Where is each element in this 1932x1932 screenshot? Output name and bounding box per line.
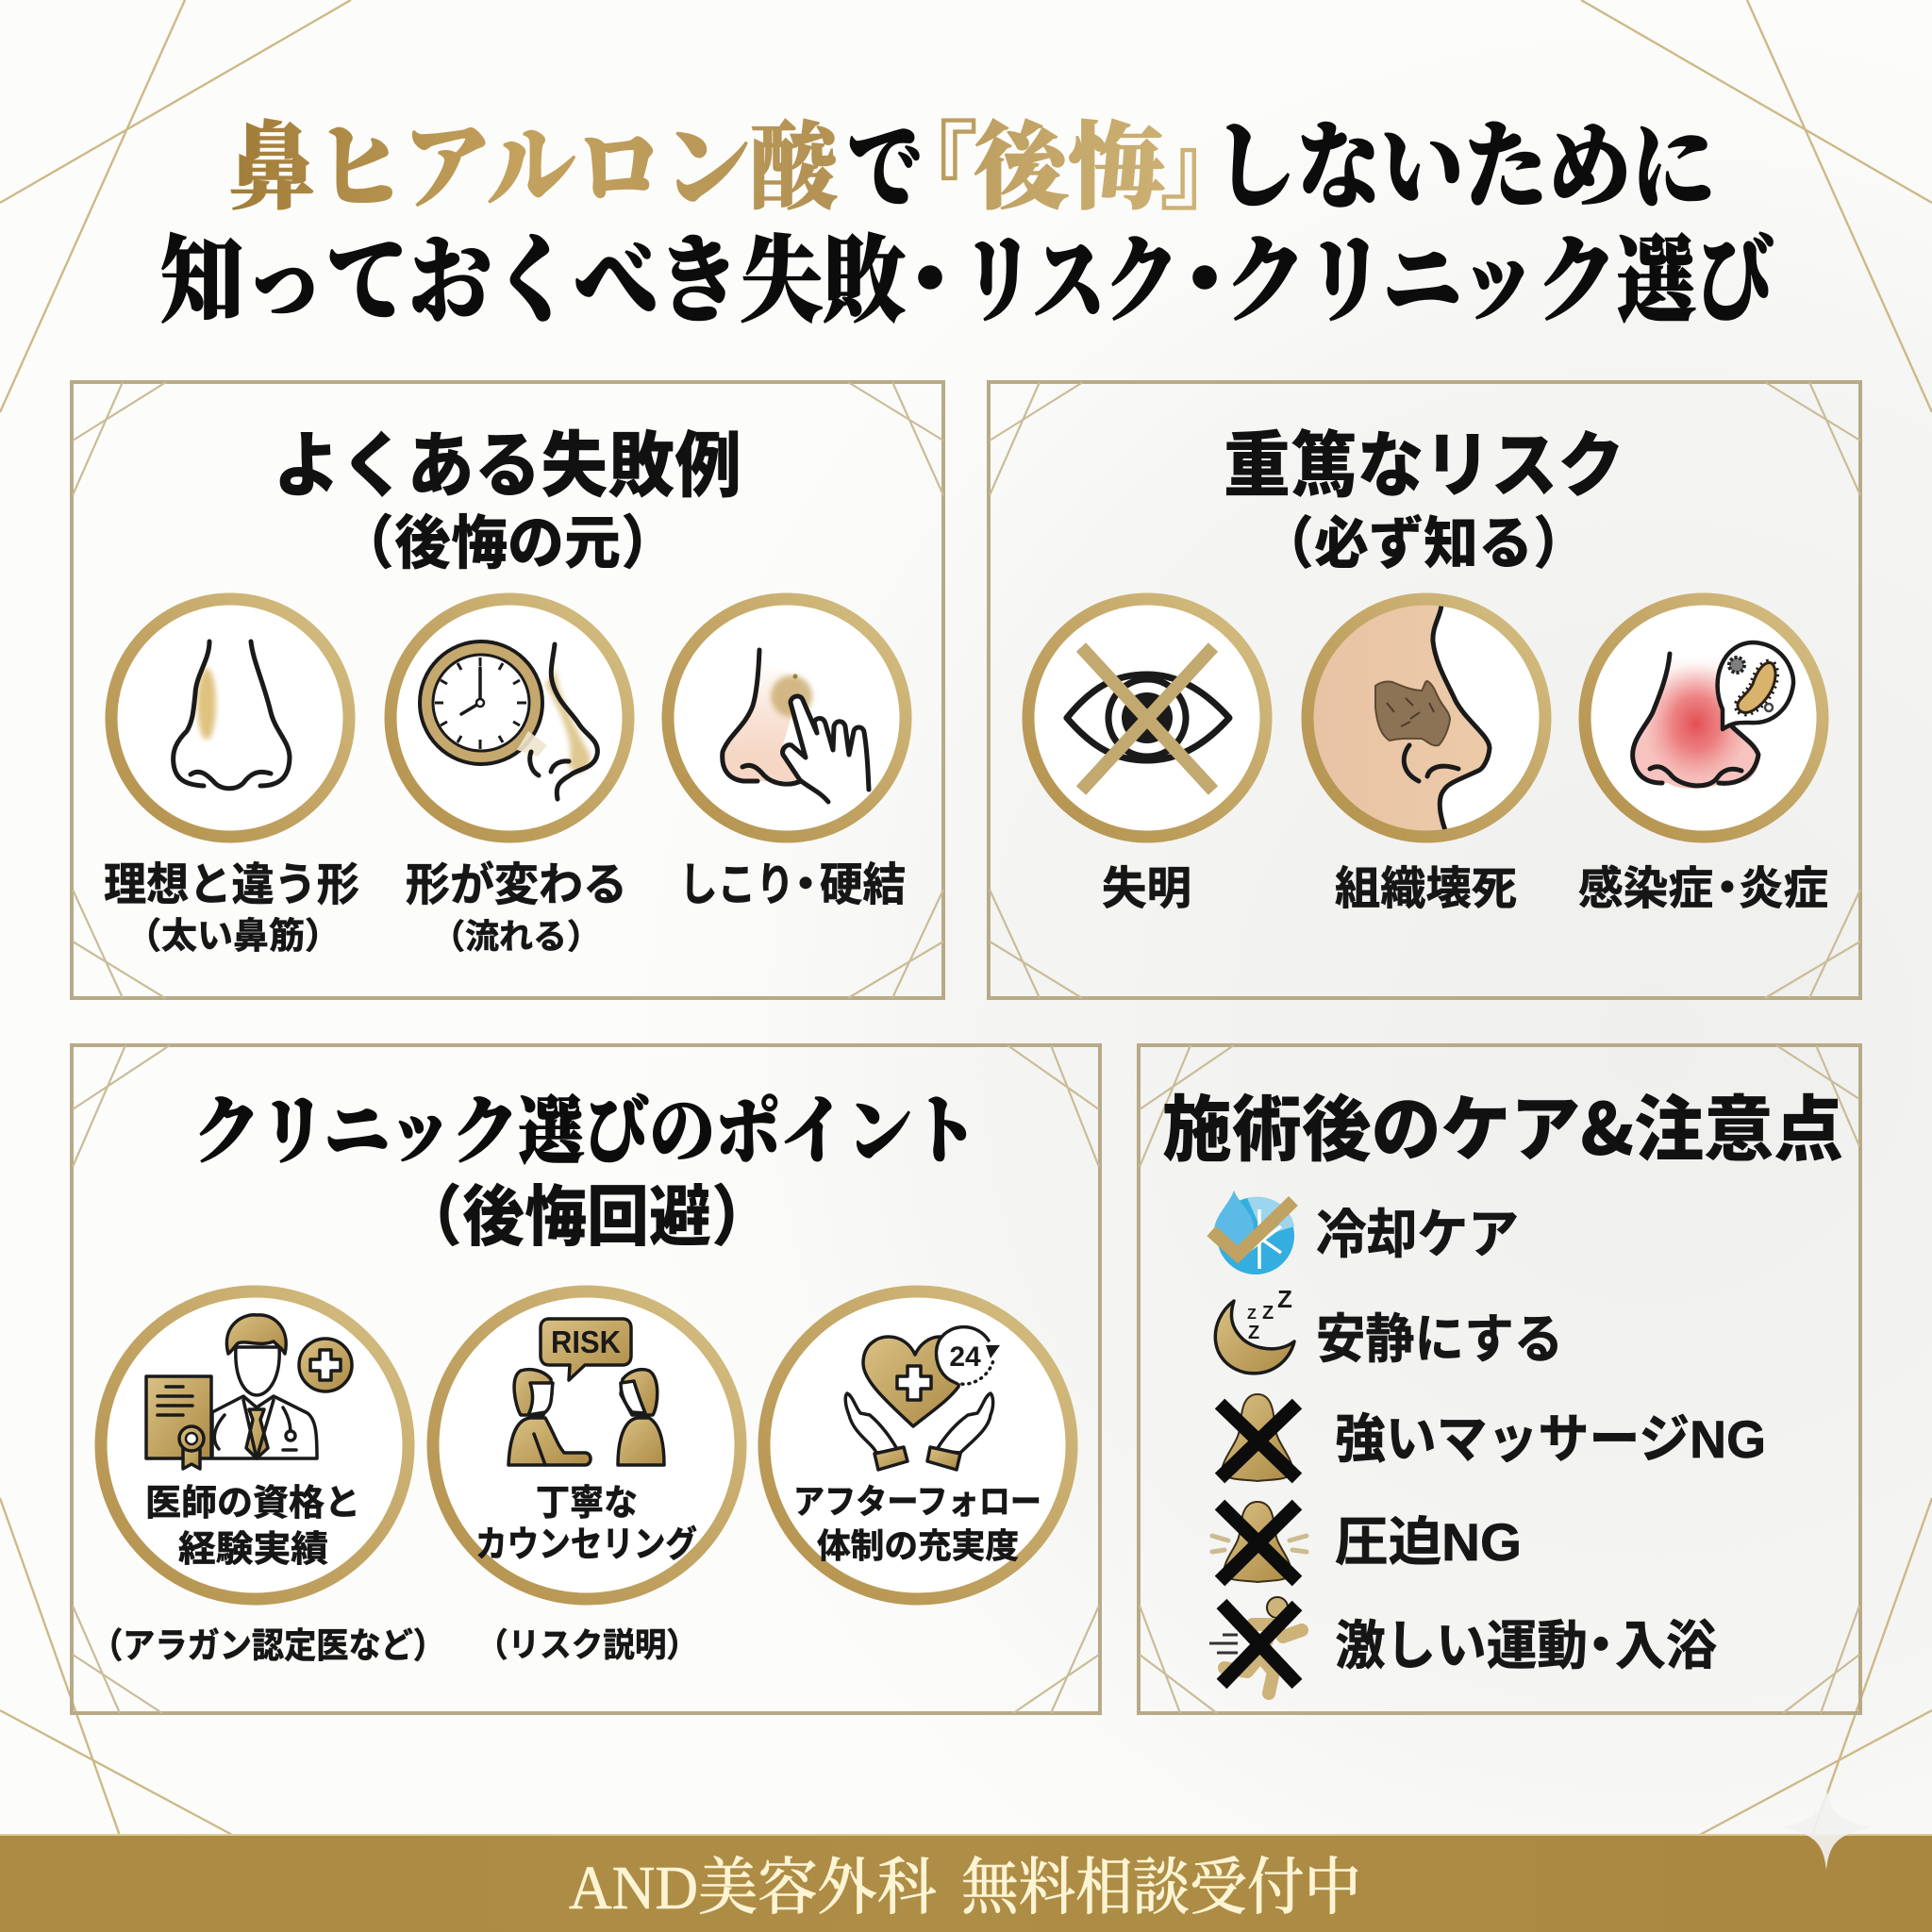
heading: aftercare and cautions: 施術後のケア&注意点: [1162, 1072, 1843, 1175]
heading: serious risks: 重篤なリスク: [1224, 426, 1624, 507]
text: careful counselling: カウンセリング: [475, 1525, 697, 1565]
callout: aftercare system: [764, 1291, 1072, 1599]
notes under circles: （リスク説明）: [476, 1627, 698, 1664]
icon: heart, hands, 24h: [845, 1327, 1000, 1470]
title: 知っておくべき失敗: [160, 229, 906, 334]
icon: heart, hands, 24h: 24: [949, 1341, 981, 1373]
notes under circles: [91, 1626, 698, 1665]
heading: clinic selection: （後悔回避）: [400, 1180, 774, 1254]
title: しないために: [1213, 116, 1715, 221]
labels: common failures: 理想と違う形: [104, 860, 359, 910]
labels: common failures: 形が変わる: [406, 860, 627, 910]
labels: common failures: ・: [783, 860, 828, 910]
text: doctor qualification: 医師の資格と: [145, 1484, 360, 1524]
title: 』: [1160, 116, 1255, 221]
title: [160, 116, 1774, 334]
panel: common failures: [72, 382, 943, 998]
callout: doctor qualification: [101, 1291, 408, 1599]
heading: clinic selection: クリニック選びのポイント: [194, 1091, 977, 1173]
title: ・: [1158, 229, 1252, 334]
title: クリニック選び: [1226, 229, 1774, 334]
text: aftercare system: [793, 1482, 1041, 1565]
icon: crossed eye: [1028, 599, 1266, 837]
icon: crossed nose with pressure marks: [1212, 1502, 1307, 1582]
title: リスク: [961, 229, 1178, 334]
title: 鼻ヒアルロン酸: [228, 116, 843, 221]
item: no intense exercise or bath: ・: [1574, 1616, 1627, 1675]
item: cooling care: [1211, 1191, 1519, 1274]
icon: moon: Z: [1248, 1323, 1259, 1343]
icon: moon: Z: [1262, 1303, 1274, 1324]
text: careful counselling: 丁寧な: [536, 1484, 638, 1524]
labels: serious risks: ・: [1705, 864, 1750, 914]
heading: serious risks: （必ず知る）: [1259, 512, 1588, 575]
icon: moon: Z: [1247, 1307, 1257, 1323]
callout: careful counselling: [433, 1291, 741, 1599]
icon: tissue necrosis: [1302, 594, 1545, 840]
icon: moon: Z: [1277, 1285, 1292, 1313]
icon: moon: [1215, 1285, 1294, 1374]
labels: common failures: （太い鼻筋）: [125, 917, 341, 957]
labels: serious risks: 失明: [1102, 864, 1191, 914]
item: cooling care: 冷却ケア: [1316, 1205, 1519, 1264]
icon: wide nose bridge: [111, 599, 349, 837]
icon: doctor and certificate: [146, 1315, 352, 1469]
heading: common failures: （後悔の元）: [338, 511, 677, 576]
heading: common failures: よくある失敗例: [274, 426, 741, 507]
icon: crossed runner: [1209, 1597, 1302, 1693]
item: no compression: 圧迫NG: [1335, 1512, 1522, 1572]
title: 『: [883, 116, 977, 221]
item: rest quietly: 安静にする: [1316, 1309, 1563, 1369]
item: no strong massage: [1220, 1394, 1766, 1481]
heading: common failures: [274, 426, 741, 576]
icon: infection: [1585, 599, 1823, 837]
labels: serious risks: 組織壊死: [1335, 864, 1517, 914]
labels: common failures: [104, 860, 906, 957]
icon: risk conversation: RISK: [551, 1324, 621, 1359]
footer text: 無料相談受付中: [961, 1854, 1361, 1923]
item: no strong massage: 強いマッサージNG: [1335, 1409, 1766, 1469]
labels: common failures: 硬結: [820, 860, 906, 910]
text: aftercare system: 体制の充実度: [817, 1526, 1019, 1565]
icon: crossed nose: [1220, 1394, 1297, 1481]
panel: serious risks: [989, 382, 1860, 998]
text: doctor qualification: [145, 1484, 360, 1570]
text: aftercare system: アフターフォロー: [793, 1482, 1041, 1521]
text: doctor qualification: 経験実績: [178, 1530, 328, 1570]
icon: risk conversation: [508, 1319, 664, 1465]
footer band: [0, 1834, 1932, 1932]
labels: common failures: （流れる）: [431, 917, 601, 956]
title: 後悔: [974, 116, 1164, 221]
item: rest quietly: [1215, 1285, 1563, 1374]
labels: serious risks: 感染症: [1578, 864, 1713, 914]
item: no compression: [1212, 1502, 1522, 1582]
heading: serious risks: [1224, 426, 1624, 575]
item: no intense exercise or bath: 入浴: [1615, 1616, 1717, 1675]
title: ・: [883, 229, 977, 334]
title: で: [847, 116, 922, 221]
footer text: AND美容外科: [569, 1854, 937, 1923]
icon: clock and nose: [391, 599, 628, 837]
icon: lump and pressing finger: [668, 599, 906, 837]
panel: clinic selection: [72, 1045, 1100, 1713]
labels: serious risks: [1102, 864, 1828, 914]
icon: sparkle: [1780, 1786, 1873, 1871]
labels: common failures: しこり: [679, 860, 794, 910]
heading: clinic selection: [194, 1091, 977, 1254]
notes under circles: （アラガン認定医など）: [91, 1626, 445, 1665]
text: careful counselling: [475, 1484, 697, 1565]
item: no intense exercise or bath: 激しい運動: [1335, 1616, 1588, 1675]
icon: cooling: [1211, 1191, 1294, 1274]
item: no intense exercise or bath: [1209, 1597, 1717, 1693]
panel: aftercare and cautions: [1139, 1045, 1860, 1713]
labels: serious risks: 炎症: [1739, 864, 1828, 914]
